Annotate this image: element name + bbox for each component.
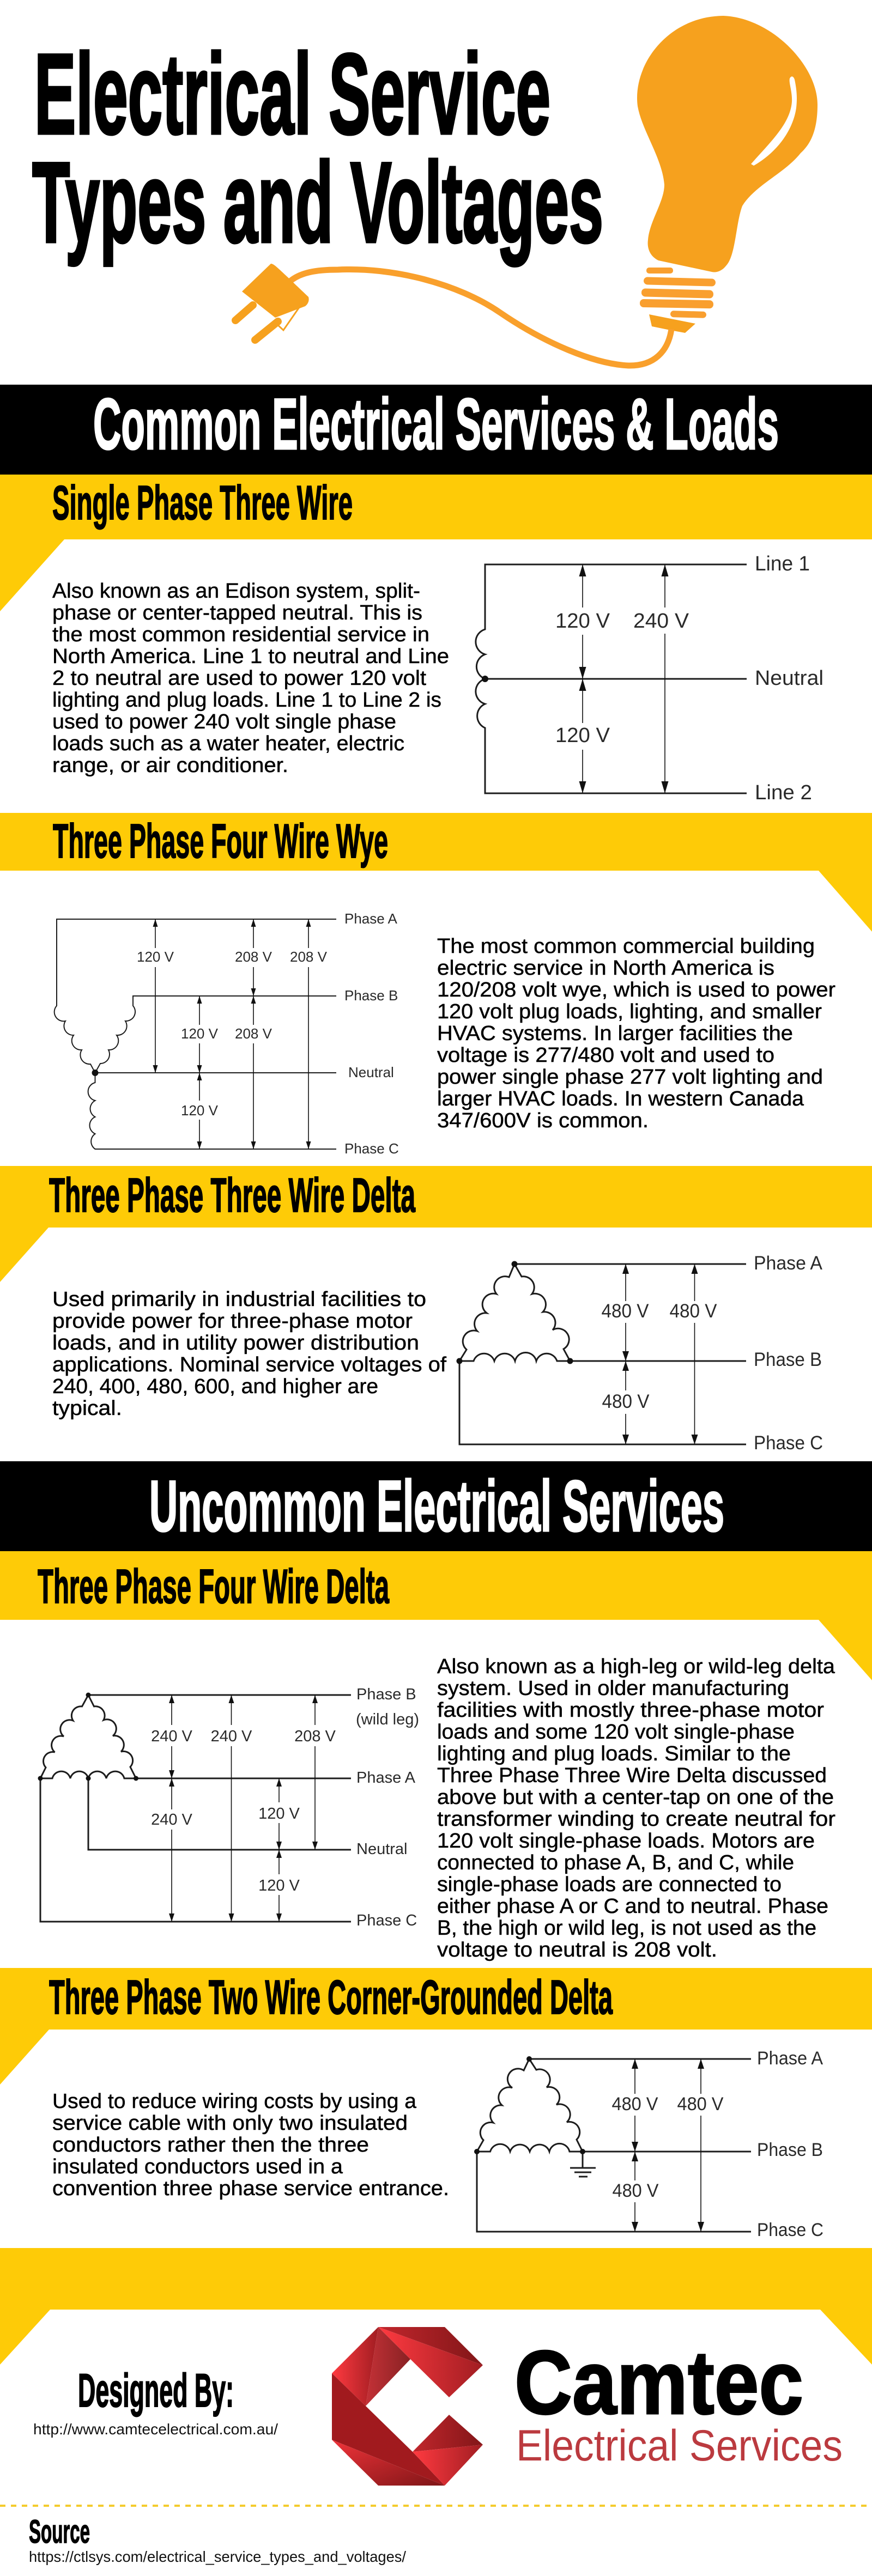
text block <box>437 935 835 1132</box>
credit: designed by <box>33 2365 278 2438</box>
diagram: single phase <box>476 552 823 804</box>
text block: system. Used in older manufacturing <box>437 1677 789 1700</box>
heading: Three Phase Four Wire Delta <box>38 1559 390 1613</box>
diagram: corner-grounded delta: 480 V <box>611 2094 658 2115</box>
text block: voltage to neutral is 208 volt. <box>437 1939 717 1961</box>
text block <box>52 2090 449 2200</box>
diagram: wye: 208 V <box>290 949 328 965</box>
text block: HVAC systems. In larger facilities the <box>437 1022 793 1045</box>
logo: camtec wordmark: Electrical Services <box>516 2421 843 2470</box>
footer band <box>0 2248 872 2365</box>
diagram: delta: 480 V <box>669 1301 717 1322</box>
text block: loads, and in utility power distribution <box>52 1332 419 1354</box>
heading band <box>0 1551 872 1680</box>
text block: facilities with mostly three-phase motor <box>437 1699 824 1722</box>
diagram: wye: 208 V <box>235 949 272 965</box>
diagram: corner-grounded delta: 480 V <box>677 2094 724 2115</box>
text block: lighting and plug loads. Similar to the <box>437 1742 791 1765</box>
heading band <box>0 1166 872 1282</box>
text block: single-phase loads are connected to <box>437 1873 782 1896</box>
panel: single phase three wire <box>0 475 872 804</box>
text block: Also known as a high-leg or wild-leg delta <box>437 1655 835 1678</box>
credit: designed by: http://www.camtecelectrical.com.au/ <box>33 2421 278 2438</box>
diagram: high-leg delta: 120 V <box>258 1805 300 1822</box>
text block: the most common residential service in <box>52 623 429 646</box>
text block: Used to reduce wiring costs by using a <box>52 2090 417 2113</box>
text block: conductors rather then the three <box>52 2134 369 2156</box>
diagram: single phase: Line 1 <box>755 552 810 575</box>
text block: 120 volt single-phase loads. Motors are <box>437 1830 815 1852</box>
text block: convention three phase service entrance. <box>52 2177 449 2200</box>
heading band <box>0 475 872 611</box>
text block: phase or center-tapped neutral. This is <box>52 602 422 624</box>
text block: loads and some 120 volt single-phase <box>437 1721 795 1743</box>
diagram: high-leg delta: Phase B <box>356 1686 416 1703</box>
text block: 347/600V is common. <box>437 1109 649 1132</box>
text block <box>52 580 449 777</box>
text block: power single phase 277 volt lighting and <box>437 1066 823 1089</box>
text block: larger HVAC loads. In western Canada <box>437 1087 804 1110</box>
text block: insulated conductors used in a <box>52 2155 343 2178</box>
heading band <box>0 1968 872 2085</box>
text block <box>52 1288 446 1420</box>
diagram: corner-grounded delta: Phase B <box>757 2140 823 2160</box>
text block: electric service in North America is <box>437 957 774 980</box>
text block: B, the high or wild leg, is not used as the <box>437 1917 816 1940</box>
heading: Single Phase Three Wire <box>52 476 353 530</box>
diagram: wye: 208 V <box>235 1025 272 1042</box>
diagram: single phase: 240 V <box>633 610 689 633</box>
heading: Three Phase Four Wire Wye <box>53 814 388 868</box>
text block: Also known as an Edison system, split- <box>52 580 420 603</box>
diagram: wye: Phase C <box>344 1140 399 1157</box>
logo: camtec mark <box>332 2327 483 2486</box>
diagram: single phase: 120 V <box>555 724 610 747</box>
text block: connected to phase A, B, and C, while <box>437 1851 794 1874</box>
text block <box>437 1655 835 1961</box>
diagram: wye: Neutral <box>348 1064 394 1080</box>
logo: camtec wordmark: Camtec <box>514 2332 803 2433</box>
panel: three phase four wire wye <box>0 813 872 1157</box>
text block: either phase A or C and to neutral. Phase <box>437 1895 828 1918</box>
diagram: high-leg delta: (wild leg) <box>356 1711 419 1728</box>
text block: North America. Line 1 to neutral and Line <box>52 645 449 668</box>
diagram: high-leg delta: Phase A <box>356 1769 416 1787</box>
diagram: wye <box>55 910 399 1157</box>
heading: Three Phase Three Wire Delta <box>49 1168 416 1222</box>
text block: 120/208 volt wye, which is used to power <box>437 979 835 1001</box>
diagram: high-leg delta: 240 V <box>211 1728 252 1745</box>
panel: three phase four wire delta <box>0 1551 872 1961</box>
diagram: single phase: Neutral <box>755 667 823 690</box>
diagram: delta: Phase A <box>754 1253 823 1274</box>
text block: transformer winding to create neutral for <box>437 1808 835 1831</box>
diagram: high-leg delta: 208 V <box>294 1728 336 1745</box>
diagram: wye: Phase A <box>344 910 398 927</box>
diagram: high-leg delta: 240 V <box>151 1728 193 1745</box>
text block: The most common commercial building <box>437 935 815 958</box>
title <box>32 30 603 266</box>
diagram: delta <box>457 1253 823 1454</box>
diagram: corner-grounded delta: Phase C <box>757 2220 823 2240</box>
text block: service cable with only two insulated <box>52 2112 408 2135</box>
text block: typical. <box>52 1397 122 1420</box>
text block: provide power for three-phase motor <box>52 1310 413 1333</box>
text block: above but with a center-tap on one of the <box>437 1786 834 1809</box>
source: Source <box>29 2513 90 2550</box>
text block: applications. Nominal service voltages of <box>52 1353 446 1376</box>
credit: designed by: Designed By: <box>78 2365 234 2417</box>
source <box>29 2513 406 2565</box>
diagram: delta: 480 V <box>602 1301 649 1322</box>
diagram: wye: 120 V <box>137 949 174 965</box>
diagram: delta: 480 V <box>602 1391 650 1412</box>
diagram: corner-grounded delta: Phase A <box>757 2048 823 2069</box>
panel: three phase two wire corner-grounded delta <box>0 1968 872 2240</box>
text block: 2 to neutral are used to power 120 volt <box>52 667 426 690</box>
diagram: high-leg delta: Neutral <box>356 1840 408 1858</box>
diagram: corner-grounded delta <box>474 2048 823 2240</box>
text block: range, or air conditioner. <box>52 754 288 777</box>
diagram: high-leg delta <box>38 1686 419 1929</box>
icon: light bulb with cord and plug <box>235 16 818 366</box>
diagram: single phase: 120 V <box>555 610 610 633</box>
text block: Three Phase Three Wire Delta discussed <box>437 1764 827 1787</box>
panel: three phase three wire delta <box>0 1166 872 1454</box>
diagram: high-leg delta: 120 V <box>258 1877 300 1894</box>
text block: Used primarily in industrial facilities to <box>52 1288 426 1311</box>
heading band <box>0 813 872 932</box>
text block: 240, 400, 480, 600, and higher are <box>52 1375 378 1398</box>
diagram: wye: 120 V <box>181 1102 219 1119</box>
diagram: delta: Phase C <box>754 1432 823 1454</box>
text block: used to power 240 volt single phase <box>52 710 396 733</box>
diagram: single phase: Line 2 <box>755 781 812 804</box>
text block: loads such as a water heater, electric <box>52 732 404 755</box>
source: https://ctlsys.com/electrical_service_types_and_voltages/ <box>29 2548 406 2565</box>
text block: 120 volt plug loads, lighting, and smaller <box>437 1000 822 1023</box>
diagram: corner-grounded delta: 480 V <box>613 2180 659 2201</box>
diagram: high-leg delta: Phase C <box>356 1912 417 1929</box>
diagram: wye: 120 V <box>181 1025 219 1042</box>
text block: voltage is 277/480 volt and used to <box>437 1044 774 1067</box>
diagram: high-leg delta: 240 V <box>151 1811 193 1828</box>
text block: lighting and plug loads. Line 1 to Line 2 is <box>52 689 441 712</box>
diagram: delta: Phase B <box>754 1349 822 1370</box>
diagram: wye: Phase B <box>344 987 398 1004</box>
